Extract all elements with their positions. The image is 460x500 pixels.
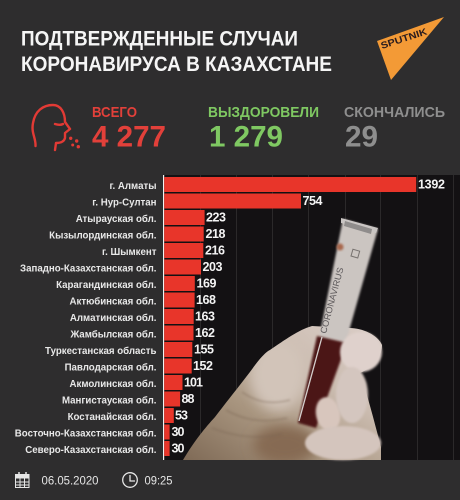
- stat label: СКОНЧАЛИСЬ: [344, 104, 445, 121]
- row: Shymkent: [102, 243, 225, 258]
- row: Akmola: 101: [184, 376, 203, 390]
- row: Shymkent: 216: [205, 244, 225, 258]
- logo: Sputnik: SPUTNIK: [380, 27, 429, 52]
- row: North Kazakhstan: [25, 441, 185, 456]
- row: West Kazakhstan: 203: [202, 260, 223, 274]
- row: Turkestan: 155: [194, 342, 214, 356]
- row: Zhambyl: Жамбылская обл.: [69, 330, 157, 340]
- row: Kyzylorda: 218: [206, 227, 226, 241]
- stat value: 1 279: [209, 120, 283, 154]
- row: Aktobe: [70, 292, 216, 308]
- row: Zhambyl: [69, 326, 215, 340]
- row: Atyrau: [76, 210, 226, 225]
- row: Mangystau: [62, 392, 195, 406]
- row: Pavlodar: Павлодарская обл.: [65, 362, 157, 374]
- row: Kyzylorda: [49, 226, 226, 242]
- photo: fingers: [305, 332, 382, 460]
- chart panel: photo background: [164, 175, 460, 465]
- row: Almaty region: [70, 309, 215, 324]
- row: Nur-Sultan: [92, 194, 323, 208]
- row: Turkestan: Туркестанская область: [45, 346, 157, 357]
- row: Nur-Sultan: 754: [302, 194, 323, 208]
- row: Aktobe: Актюбинская обл.: [70, 296, 157, 308]
- chart axis: [163, 175, 164, 460]
- stat label: ВСЕГО: [92, 104, 137, 121]
- footer: date: [16, 472, 98, 488]
- row: Almaty: г. Алматы: [109, 181, 156, 192]
- stat: recovered: [208, 104, 319, 154]
- row: Pavlodar: [65, 358, 213, 374]
- stat value: 29: [345, 120, 378, 154]
- row: West Kazakhstan: [20, 260, 223, 274]
- date text: 06.05.2020: [42, 476, 98, 488]
- row: Almaty: 1392: [418, 178, 445, 192]
- photo: gloved hand: [183, 326, 382, 465]
- row: Aktobe: 168: [196, 293, 216, 307]
- row: Shymkent: г. Шымкент: [102, 247, 157, 258]
- row: Karaganda: Карагандинская обл.: [56, 280, 157, 291]
- title: [21, 26, 332, 76]
- row: Mangystau: Мангистауская обл.: [62, 396, 157, 406]
- tube lower with blood: [298, 336, 347, 428]
- row: North Kazakhstan: 30: [172, 442, 185, 456]
- title: КОРОНАВИРУСА В КАЗАХСТАНЕ: [21, 52, 332, 76]
- hand shading: [227, 336, 317, 460]
- row: Atyrau: Атырауская обл.: [76, 214, 157, 225]
- row: North Kazakhstan: Северо-Казахстанская обл.: [25, 445, 157, 456]
- row: Almaty region: 163: [195, 310, 215, 324]
- footer: time: [123, 473, 172, 488]
- row: Kostanay: Костанайская обл.: [68, 412, 157, 423]
- row: Kostanay: 53: [175, 408, 188, 422]
- title: ПОДТВЕРЖДЕННЫЕ СЛУЧАИ: [21, 26, 298, 50]
- photo: test tube: [298, 218, 378, 428]
- row: Almaty region: Алматинская обл.: [70, 313, 157, 324]
- bar chart: [15, 175, 445, 460]
- row: East Kazakhstan: [15, 424, 185, 440]
- logo: Sputnik: [377, 17, 444, 80]
- icon: calendar: [16, 472, 29, 488]
- icon: clock: [123, 473, 137, 487]
- row: West Kazakhstan: Западно-Казахстанская обл.: [20, 264, 157, 274]
- row: Karaganda: 169: [196, 276, 217, 290]
- row: East Kazakhstan: Восточно-Казахстанская обл.: [15, 428, 157, 440]
- row: East Kazakhstan: 30: [172, 425, 185, 439]
- row: Turkestan: [45, 342, 214, 357]
- row: Akmola: [70, 375, 203, 390]
- grid lines: [200, 175, 454, 460]
- stat label: ВЫЗДОРОВЕЛИ: [208, 104, 319, 121]
- row: Kyzylorda: Кызылординская обл.: [49, 230, 157, 242]
- row: Karaganda: [56, 276, 217, 291]
- stat: deaths: [344, 104, 445, 154]
- time text: 09:25: [144, 476, 172, 488]
- row: Zhambyl: 162: [195, 326, 215, 340]
- stat: total: [33, 104, 166, 154]
- row: Atyrau: 223: [206, 210, 226, 224]
- row: Akmola: Акмолинская обл.: [70, 379, 157, 390]
- row: Kostanay: [68, 408, 188, 423]
- stat value: 4 277: [92, 120, 166, 154]
- row: Nur-Sultan: г. Нур-Султан: [92, 198, 157, 208]
- row: Pavlodar: 152: [193, 359, 213, 373]
- icon: coughing head: [33, 105, 80, 150]
- photo: test tube: CORONAVIRUS: [318, 266, 346, 335]
- row: Almaty: [109, 177, 445, 192]
- row: Mangystau: 88: [182, 392, 195, 406]
